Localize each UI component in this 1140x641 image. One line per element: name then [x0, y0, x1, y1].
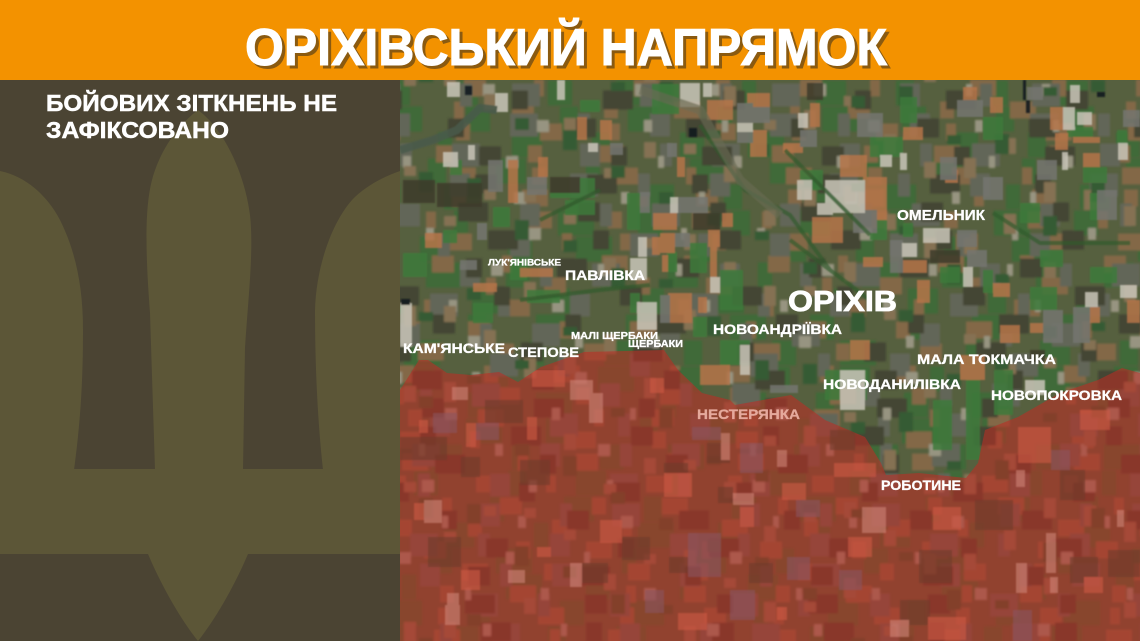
header bar [0, 0, 1140, 80]
label: Степове: СТЕПОВЕ [508, 344, 579, 360]
title: ОРІХІВСЬКИЙ НАПРЯМОК [248, 21, 890, 80]
map fields: orange [425, 87, 1140, 385]
label: Омельник: ОМЕЛЬНИК [897, 207, 986, 224]
map fields: light [400, 80, 1137, 410]
occupied area fields: dark [400, 400, 1140, 625]
label: Кам'янське: КАМ'ЯНСЬКЕ [403, 340, 505, 356]
occupied area fields: bright red [414, 370, 1110, 640]
label: Лук'янівське: ЛУК'ЯНІВСЬКЕ [488, 258, 561, 268]
label: Павлівка: ПАВЛІВКА [565, 267, 645, 283]
label: Щербаки: ЩЕРБАКИ [628, 339, 683, 350]
map fields: green [403, 84, 1127, 460]
status message: ЗАФІКСОВАНО [46, 117, 229, 143]
status message [46, 89, 337, 143]
label: Новоданилівка: НОВОДАНИЛІВКА [823, 376, 961, 392]
label: Нестерянка: НЕСТЕРЯНКА [697, 406, 800, 422]
label: Новоандріївка: НОВОАНДРІЇВКА [713, 321, 842, 337]
occupied area fields: pink [424, 380, 1124, 637]
panel: satellite map [380, 70, 1140, 641]
title: ОРІХІВСЬКИЙ НАПРЯМОК [245, 18, 887, 77]
occupied area fields: purple [433, 413, 1070, 641]
status message: БОЙОВИХ ЗІТКНЕНЬ НЕ [46, 89, 337, 116]
icon: trident emblem [0, 110, 400, 641]
map fields: dark [403, 83, 1045, 362]
panel: left status panel [0, 80, 400, 641]
map water bodies [401, 80, 1105, 305]
label: Малі Щербаки: МАЛІ ЩЕРБАКИ [571, 331, 658, 342]
label: Мала Токмачка: МАЛА ТОКМАЧКА [917, 351, 1056, 367]
russian-occupied area overlay [400, 340, 1140, 641]
map mosaic texture [380, 70, 1140, 641]
label: Новопокровка: НОВОПОКРОВКА [991, 387, 1122, 403]
label: Роботине: РОБОТИНЕ [881, 478, 961, 493]
map tree lines and river [400, 90, 1130, 300]
label: Оріхів: ОРІХІВ [788, 286, 897, 318]
map place labels [403, 207, 1122, 493]
map fields: grey [460, 87, 1140, 393]
